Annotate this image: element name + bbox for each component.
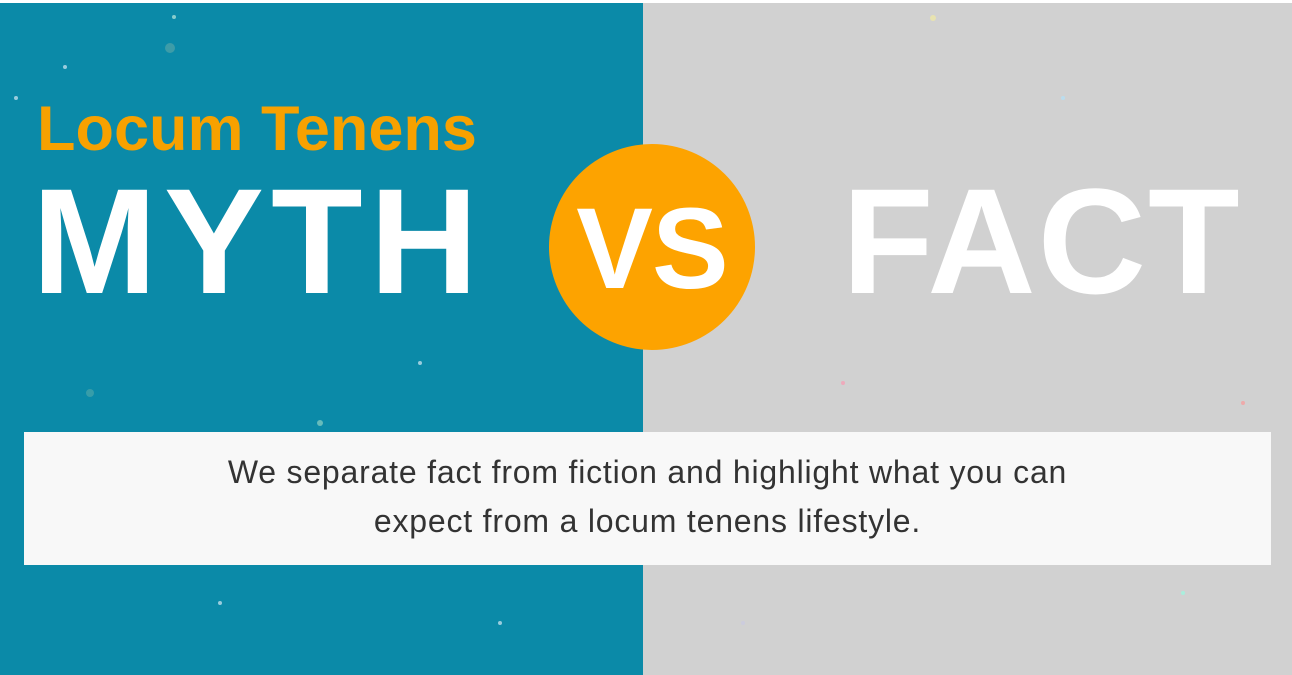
heading: Locum Tenens: Locum Tenens bbox=[37, 94, 477, 164]
text block: subtitle bbox=[24, 432, 1271, 565]
heading: FACT: FACT bbox=[842, 157, 1242, 325]
text block: subtitle: expect from a locum tenens lifestyle. bbox=[374, 503, 921, 539]
text block: subtitle: We separate fact from fiction and highlight what you can bbox=[228, 454, 1067, 490]
icon: VS circle: VS bbox=[576, 185, 728, 313]
panel: fact (gray right) bbox=[643, 3, 1292, 675]
heading: MYTH: MYTH bbox=[32, 157, 485, 325]
panel: myth (teal left) bbox=[0, 3, 643, 675]
icon: VS circle bbox=[549, 144, 755, 350]
